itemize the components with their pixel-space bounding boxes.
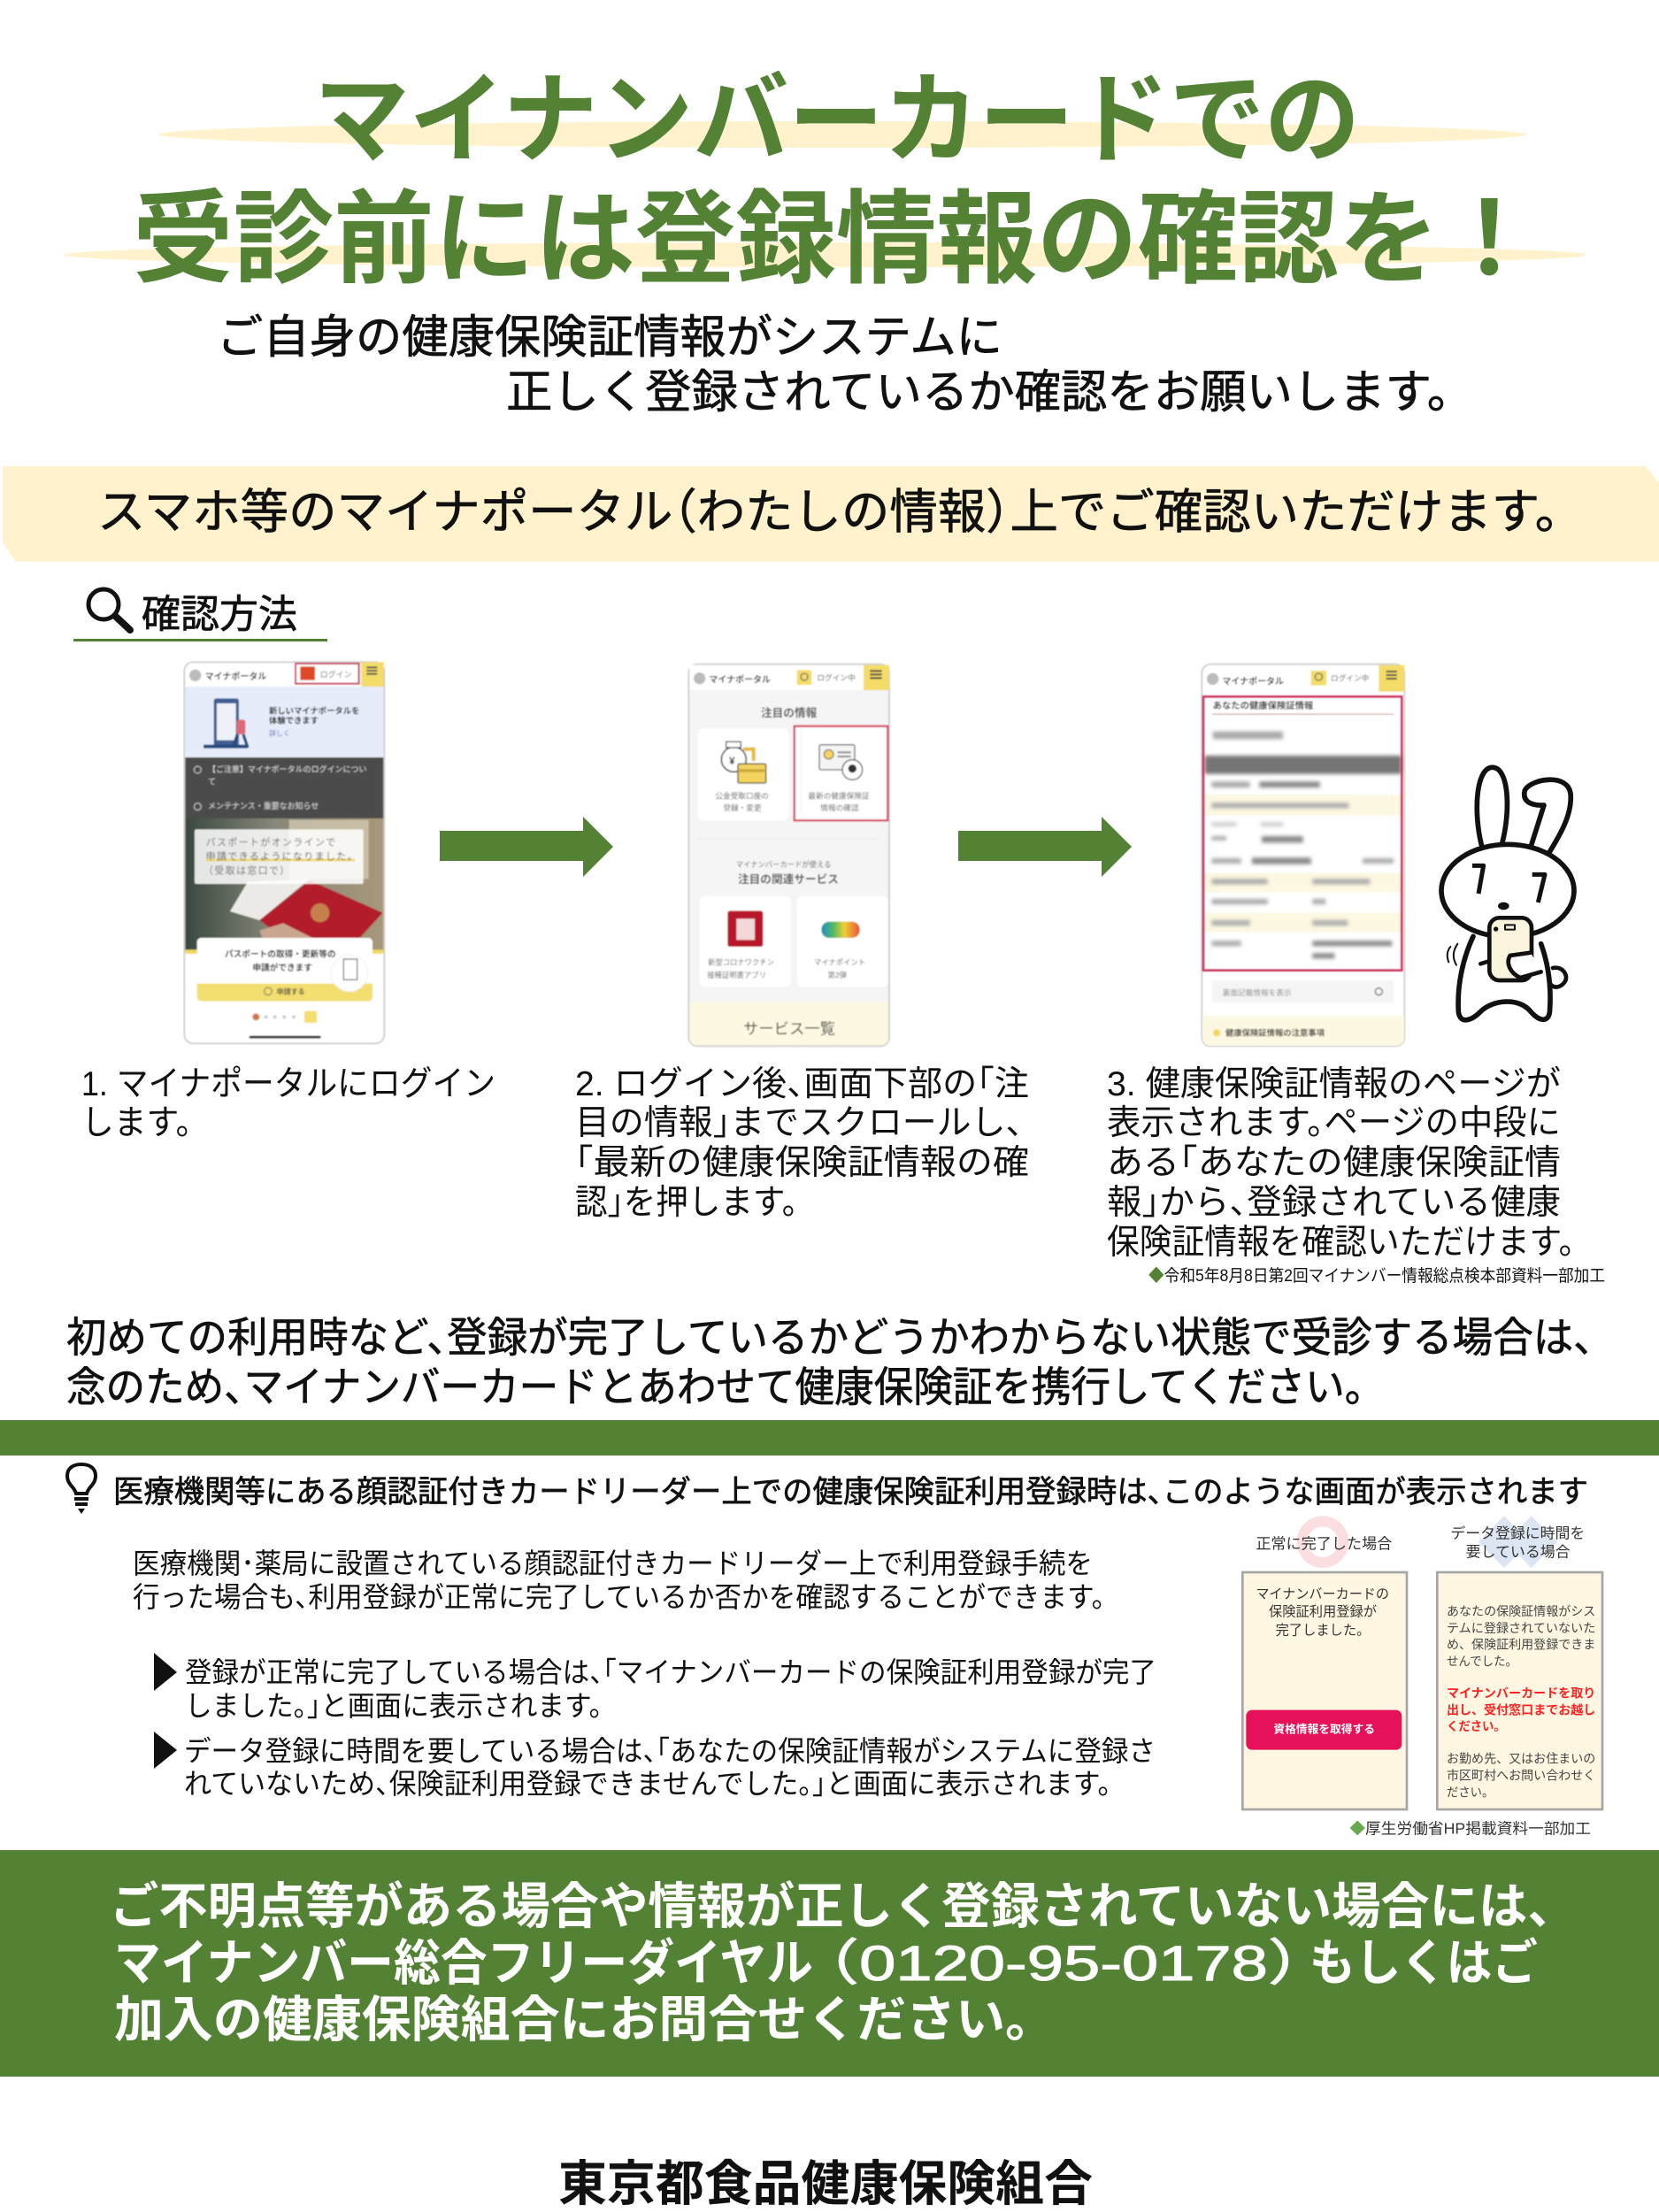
phone screenshot 1: login: 体験できます <box>269 715 319 725</box>
screen: registration complete: 正常に完了した場合 <box>1256 1536 1392 1553</box>
phone screenshot 1: login: 申請ができます <box>252 963 312 973</box>
screen: data registration delayed: 市区町村へお問い合わせく <box>1447 1769 1595 1783</box>
phone screenshot 2: featured info: 最新の健康保険証 <box>808 790 870 800</box>
source note: MHLW: ◆厚生労働省HP掲載資料一部加工 <box>1349 1820 1591 1838</box>
screen: data registration delayed: マイナンバーカードを取り <box>1447 1686 1595 1700</box>
phone screenshot 2: featured info: マイナポイント <box>814 958 865 967</box>
phone screenshot 2: featured info: 情報の確認 <box>820 803 859 812</box>
phone screenshot 2: featured info: 公金受取口座の <box>715 790 769 800</box>
screen: registration complete: 完了しました。 <box>1276 1623 1370 1638</box>
phone screenshot 2: featured info: 接種証明書アプリ <box>707 971 766 979</box>
screen: data registration delayed: テムに登録されていないた <box>1447 1621 1595 1635</box>
explanation paragraph: 行った場合も、利用登録が正常に完了しているか否かを確認することができます。 <box>133 1581 1105 1613</box>
phone screenshot 1: login <box>184 662 384 1043</box>
panel: contact information: ご不明点等がある場合や情報が正しく登録されていない場合には、 <box>110 1867 1552 1939</box>
title block: マイナンバーカードでの <box>314 40 1360 183</box>
phone screenshot 2: featured info: マイナポータル <box>709 675 771 686</box>
step 3 text: 報」から、登録されている健康 <box>1107 1184 1561 1222</box>
source note: personal info review: ◆令和5年8月8日第2回マイナンバー情報総点検本部資料一部加工 <box>1148 1266 1605 1286</box>
phone screenshot 1: login: 詳しく <box>269 728 290 737</box>
panel: contact information <box>0 1850 1659 2077</box>
heading: how to confirm <box>73 589 327 641</box>
phone screenshot 3: health insurance info: 裏面記載情報を表示 <box>1223 987 1292 997</box>
step 3 text: ある「あなたの健康保険証情 <box>1107 1144 1561 1182</box>
green divider band <box>0 1420 1659 1455</box>
bullet: registration complete: しました。」と画面に表示されます。 <box>185 1690 603 1722</box>
phone screenshot 3: health insurance info: あなたの健康保険証情報 <box>1213 700 1314 711</box>
step 1 text: します。 <box>81 1104 192 1142</box>
notice: carry health insurance card: 初めての利用時など、登録が完了しているかどうかわからない状態で受診する場合は、 <box>66 1314 1594 1361</box>
panel: contact information: もしくはご <box>1310 1924 1538 1995</box>
phone screenshot 1: login: パスポートがオンラインで <box>206 836 336 849</box>
notice: carry health insurance card <box>66 1314 1594 1410</box>
screen: registration complete <box>1242 1521 1407 1809</box>
banner: confirm on My Number portal <box>3 466 1659 562</box>
screen: data registration delayed: あなたの保険証情報がシス <box>1447 1604 1595 1618</box>
phone screenshot 1: login: 新しいマイナポータルを <box>269 706 359 716</box>
phone screenshot 1: login: ログイン <box>320 669 352 679</box>
screen: registration complete: 保険証利用登録が <box>1269 1605 1377 1620</box>
arrow 1 <box>440 817 613 877</box>
phone screenshot 2: featured info: 注目の関連サービス <box>738 872 839 886</box>
step 3 text <box>1107 1065 1575 1262</box>
step 1 text: 1. マイナポータルにログイン <box>81 1065 495 1103</box>
screen: data registration delayed: 要している場合 <box>1466 1543 1571 1560</box>
phone screenshot 2: featured info: マイナンバーカードが使える <box>736 860 832 869</box>
icon: light bulb <box>67 1464 96 1514</box>
screen: data registration delayed: ください。 <box>1447 1719 1506 1733</box>
step 3 text: 表示されます。ページの中段に <box>1107 1104 1561 1142</box>
notice: carry health insurance card: 念のため、マイナンバーカードとあわせて健康保険証を携行してください。 <box>66 1363 1364 1410</box>
step 3 text: 保険証情報を確認いただけます。 <box>1107 1224 1575 1262</box>
screen: data registration delayed: め、保険証利用登録できま <box>1447 1637 1595 1651</box>
heading: card reader screens <box>67 1464 1588 1514</box>
step 2 text: 認」を押します。 <box>575 1184 798 1222</box>
phone screenshot 3: health insurance info: ログイン中 <box>1331 672 1369 682</box>
step 2 text: 目の情報」までスクロールし、 <box>575 1104 1023 1142</box>
phone screenshot 2: featured info: サービス一覧 <box>743 1019 835 1037</box>
title block <box>64 40 1587 304</box>
screen: registration complete: マイナンバーカードの <box>1256 1587 1389 1602</box>
panel: contact information: 加入の健康保険組合にお問合せください。 <box>114 1980 1030 2052</box>
phone screenshot 1: login: 【ご注意】マイナポータルのログインについ <box>208 764 367 774</box>
bullet: registration delayed: データ登録に時間を要している場合は、「あなたの保険証情報がシステムに登録さ <box>184 1735 1156 1767</box>
subtitle: 正しく登録されているか確認をお願いします。 <box>506 367 1450 419</box>
phone screenshot 3: health insurance info: 健康保険証情報の注意事項 <box>1225 1028 1325 1038</box>
screen: data registration delayed: データ登録に時間を <box>1450 1524 1585 1541</box>
phone screenshot 2: featured info: ログイン中 <box>817 672 856 682</box>
bullet: registration delayed <box>154 1732 1156 1800</box>
bullet: registration delayed: れていないため、保険証利用登録できませんでした。」と画面に表示されます。 <box>184 1768 1111 1800</box>
subtitle <box>217 312 1450 419</box>
phone screenshot 2: featured info <box>688 664 889 1046</box>
panel: contact information: マイナンバー総合フリーダイヤル <box>114 1924 813 1995</box>
screen: data registration delayed: 出し、受付窓口までお越し <box>1447 1702 1595 1717</box>
heading: how to confirm: 確認方法 <box>142 593 297 636</box>
phone screenshot 2: featured info: 新型コロナワクチン <box>708 958 774 967</box>
phone screenshot 1: login: （受取は窓口で） <box>204 864 291 876</box>
phone screenshot 3: health insurance info <box>1202 664 1574 1046</box>
phone screenshot 3: health insurance info: マイナポータル <box>1222 676 1284 687</box>
panel: contact information: （0120-95-0178） <box>826 1935 1301 1991</box>
blurred personal data rows <box>1204 732 1402 958</box>
explanation paragraph: 医療機関･薬局に設置されている顔認証付きカードリーダー上で利用登録手続を <box>133 1548 1093 1579</box>
screen: data registration delayed <box>1437 1516 1602 1809</box>
step 1 text <box>81 1065 495 1142</box>
screen: data registration delayed: せんでした。 <box>1447 1654 1517 1668</box>
phone screenshot 2: featured info: 注目の情報 <box>761 706 818 719</box>
step 2 text <box>575 1065 1029 1222</box>
phone screenshot 2: featured info: 登録・変更 <box>723 803 762 812</box>
phone screenshot 1: login: マイナポータル <box>205 672 266 682</box>
step 3 text: 3. 健康保険証情報のページが <box>1107 1065 1561 1103</box>
arrow 2 <box>958 817 1132 877</box>
phone screenshot 1: login: て <box>208 778 216 787</box>
phone screenshot 2: featured info: ¥ <box>729 755 735 767</box>
banner: confirm on My Number portal: スマホ等のマイナポータル（わたしの情報）上でご確認いただけます。 <box>97 486 1559 539</box>
illustration: rabbit mascot with phone <box>1441 767 1574 1020</box>
step 2 text: 「最新の健康保険証情報の確 <box>575 1144 1029 1182</box>
heading: card reader screens: 医療機関等にある顔認証付きカードリーダー上での健康保険証利用登録時は、このような画面が表示されます <box>113 1475 1588 1509</box>
bullet: registration complete <box>154 1653 1156 1722</box>
screen: registration complete: 資格情報を取得する <box>1273 1722 1375 1735</box>
bullet: registration complete: 登録が正常に完了している場合は、「マイナンバーカードの保険証利用登録が完了 <box>185 1656 1156 1688</box>
step 2 text: 2. ログイン後、画面下部の「注 <box>575 1065 1029 1103</box>
phone screenshot 1: login: 申請できるようになりました。 <box>206 849 358 862</box>
icon: magnifier <box>88 589 130 630</box>
explanation paragraph <box>133 1548 1105 1613</box>
subtitle: ご自身の健康保険証情報がシステムに <box>217 312 1002 364</box>
screen: data registration delayed: ださい。 <box>1447 1786 1494 1800</box>
phone screenshot 1: login: 申請する <box>277 987 305 995</box>
phone screenshot 1: login: パスポートの取得・更新等の <box>225 949 336 960</box>
title block: 受診前には登録情報の確認を！ <box>133 157 1540 304</box>
screen: data registration delayed: お勤め先、又はお住まいの <box>1447 1752 1595 1766</box>
screen examples <box>1242 1516 1602 1838</box>
phone screenshot 1: login: メンテナンス・重要なお知らせ <box>208 801 319 810</box>
phone screenshot 2: featured info: 第2弾 <box>828 971 847 979</box>
